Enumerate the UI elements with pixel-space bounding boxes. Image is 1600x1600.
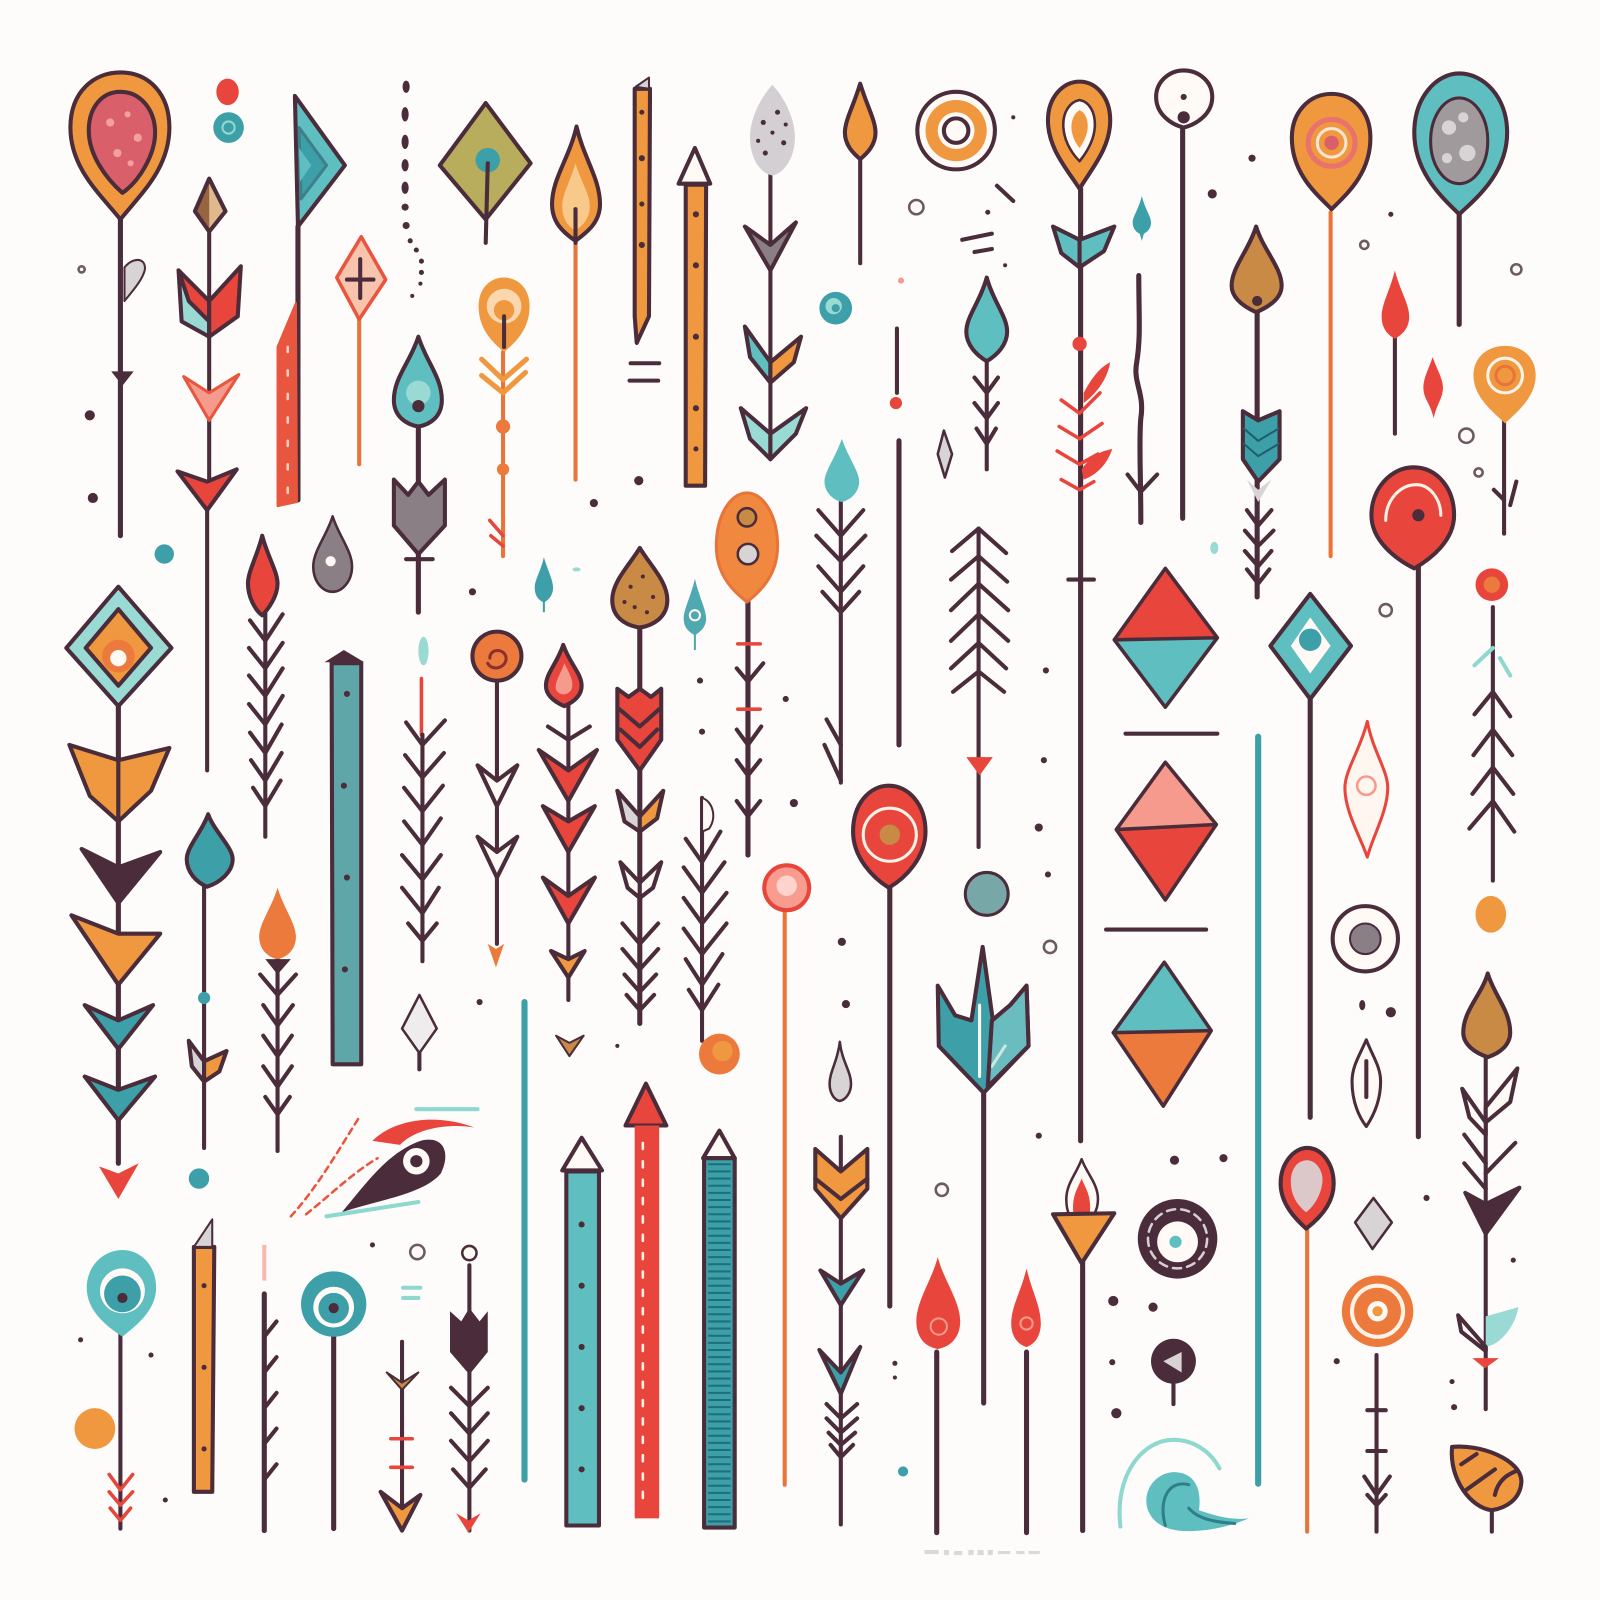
divider [1126, 732, 1217, 736]
arrow: brown speckled with red fletch [612, 548, 667, 1023]
icon: feather bird [291, 1109, 478, 1216]
dots: red and teal pair [213, 79, 244, 143]
arrow: spiral lollipop with white chevrons [472, 632, 521, 967]
diamond: pink over red [1116, 762, 1216, 900]
arrow: red leaf with barbs [248, 536, 283, 837]
bar: ribbed teal [703, 1131, 735, 1528]
arrow: orange spiral balloon [1292, 94, 1370, 556]
arrow: teal diamond long [1270, 594, 1351, 1117]
icon: grey small diamond [1355, 1198, 1392, 1249]
icon: white ring target [1333, 906, 1398, 971]
arrow: lollipop with orange shaft [1281, 1148, 1334, 1532]
pencil: tall orange with white tip [679, 148, 710, 486]
arrow: speckled feather [741, 85, 806, 459]
arrow: orange flame [552, 127, 600, 480]
icon: small grey drop [830, 1042, 851, 1101]
arrow: orange fletch with teal chevrons [815, 1137, 867, 1524]
dotted curve [402, 81, 424, 298]
icon: teal wave [1120, 1440, 1249, 1531]
arrow: orange leaf with dark chevron [1458, 973, 1519, 1409]
teal accents [155, 544, 908, 1477]
icon: teal drop small right [684, 579, 706, 650]
arrow: small orange leaf [845, 84, 876, 263]
icon: small dark circle with stem [1151, 1339, 1196, 1404]
arrow: feather barbs with orange drop [684, 798, 740, 1074]
arrow: big diamond with chevrons [66, 587, 171, 1199]
arrow: small teal leaf left [187, 814, 233, 1148]
arrow: dark fletch with barbs [450, 1246, 488, 1533]
arrow: red drop B [1011, 1268, 1041, 1533]
icon: orange leaf bottom right [1452, 1447, 1521, 1532]
arrow: orange spiral target [1342, 1276, 1413, 1532]
arrow: wavy line [1128, 276, 1157, 522]
arrow: teal speckled balloon [1414, 73, 1507, 324]
diamond: teal over orange [1113, 962, 1211, 1106]
arrow: small peach diamond [337, 237, 386, 464]
arrow: long barbs with red triangle [951, 529, 1008, 847]
line: thin with red node [890, 278, 904, 745]
icon: teal drop small left [535, 557, 553, 612]
arrow: teal ring [301, 1271, 366, 1529]
arrow: big teal fork [938, 947, 1029, 1403]
divider [1106, 928, 1206, 932]
arrow: teal peacock [74, 1250, 156, 1529]
icon: small diamond outline [938, 431, 952, 478]
arrow: teal drop with grey fletch [394, 337, 445, 612]
icon: teal bead [819, 292, 852, 324]
arrow: brown small with red bars [381, 1342, 420, 1531]
double dash [630, 363, 659, 381]
pale marks [418, 542, 1218, 665]
icon: white leaf [1352, 1040, 1381, 1127]
diamond: red over teal [1114, 568, 1217, 707]
arrow: teal flag with red strip [278, 96, 345, 506]
arrow: orange balloon with crossbars [716, 493, 778, 855]
icon: red eye [1345, 721, 1388, 857]
arrow: red lollipop long [1371, 467, 1454, 1137]
arrow: teal leaf small [966, 278, 1007, 469]
icon: dark ring target [1138, 1199, 1217, 1279]
arrow: white lollipop [1156, 70, 1212, 518]
arrow: barbs centre with red top [402, 679, 445, 961]
icon: orange target [917, 92, 995, 169]
teal double dash [403, 1288, 420, 1298]
arrow: small orange leaf with barbs [259, 888, 296, 1151]
icon: small white diamond [402, 995, 437, 1069]
arrow: side barbs [262, 1245, 277, 1531]
arrow: orange with circle and feathers [479, 278, 530, 556]
bar: red with red tip [626, 1084, 666, 1518]
arrow: pink lollipop with orange shaft [764, 865, 809, 1485]
line: long teal [1255, 737, 1261, 1484]
arrow: red dot with barbs [1469, 568, 1514, 881]
faint garbled footer marks [924, 1550, 1040, 1555]
line: teal short [521, 1002, 527, 1480]
arrow: chevron stack [178, 179, 241, 770]
pencil: small orange [635, 78, 650, 343]
arrow: long red-feathered [1048, 82, 1114, 1141]
icon: small teal drop [1133, 196, 1151, 241]
arrow: pink balloon [70, 72, 169, 536]
arrow: red drop A [916, 1257, 960, 1533]
arrow: red spiral lollipop [853, 786, 926, 1306]
ring dots [79, 200, 1521, 1259]
arrow: teal drop with barbs [816, 439, 865, 783]
scratch lines [962, 186, 1013, 252]
icon: grey speckled drop [313, 516, 352, 592]
arrow: orange leaf with teal fletch [1232, 227, 1282, 597]
arrow: orange swirl right [1473, 346, 1536, 534]
bar: teal with white tip [562, 1138, 602, 1526]
pencil: small orange bottom [194, 1219, 214, 1492]
arrow: torch [1053, 1159, 1114, 1531]
icon: tiny red flame [1423, 357, 1443, 418]
icon: grey-teal circle [965, 872, 1008, 915]
arrow: long right-side shaft dots [78, 115, 1516, 1503]
icon: small orange chevron [556, 1036, 584, 1056]
pencil: teal tall [324, 650, 364, 1064]
arrow: red chevrons [539, 645, 597, 1000]
icon: orange dot [1476, 896, 1506, 933]
arrow: small red drop [1382, 270, 1409, 434]
icon: olive diamond [440, 103, 531, 243]
